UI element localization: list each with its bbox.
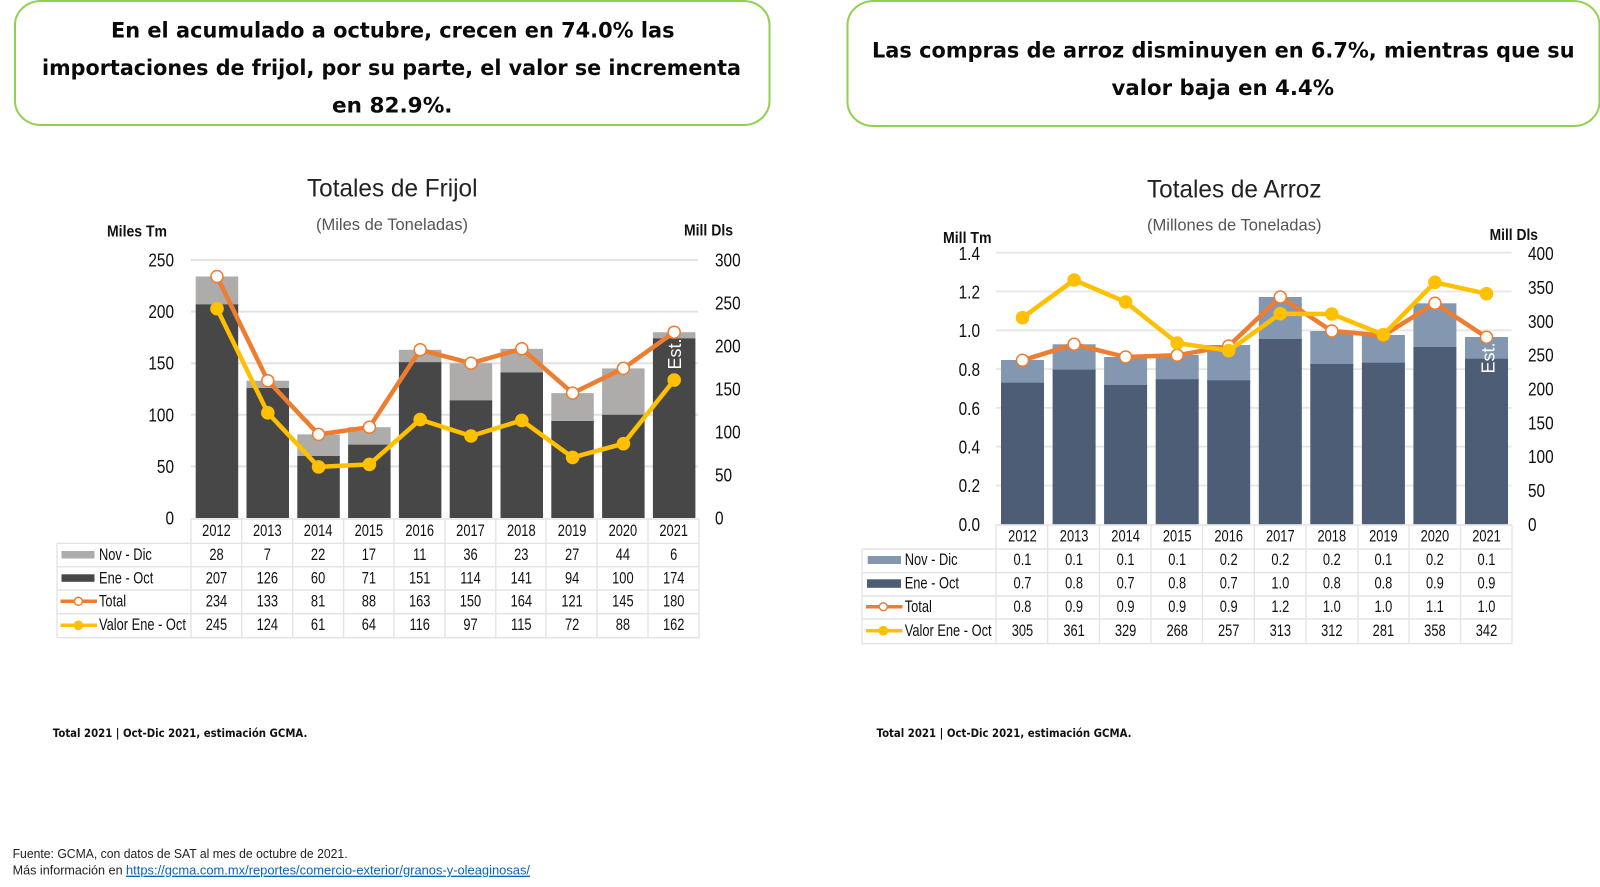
row: Nov - Dic: 17 — [362, 545, 376, 564]
callout: frijol: En el acumulado a octubre, crecen en 74.0% las — [111, 18, 674, 43]
callout: arroz: Las compras de arroz disminuyen en 6.7%, mientras que su — [872, 39, 1575, 64]
right axis labels: 0 — [1528, 515, 1537, 535]
right axis labels: 50 — [1528, 481, 1545, 501]
row: Ene - Oct: 0.7 — [1014, 574, 1031, 593]
row: Valor Ene - Oct: 245 — [206, 615, 227, 634]
table header: years: 2015 — [1163, 527, 1192, 546]
row: Total: 0.9 — [1065, 597, 1083, 617]
row: Ene - Oct: 151 — [409, 569, 430, 588]
row: Total: 234 — [206, 592, 227, 611]
row: Ene - Oct: 0.8 — [1168, 574, 1186, 593]
row: Valor Ene - Oct: 257 — [1218, 621, 1239, 641]
row: Valor Ene - Oct: Valor Ene - Oct — [905, 621, 992, 641]
right axis labels: 50 — [715, 465, 732, 486]
row: Ene - Oct: 0.7 — [1117, 574, 1135, 593]
axis title: Mill Tm: Mill Tm — [943, 230, 992, 247]
table header: years: 2017 — [1266, 527, 1295, 546]
left axis labels — [148, 250, 174, 529]
label: Est.: Est. — [1478, 342, 1498, 374]
row: Valor Ene - Oct: 124 — [257, 615, 278, 634]
row: Nov - Dic: 44 — [616, 545, 630, 564]
callout: frijol — [15, 1, 770, 125]
panel: frijol chart — [57, 175, 741, 638]
line: Total — [211, 270, 680, 440]
callout: arroz — [848, 1, 1600, 126]
left axis labels — [959, 244, 980, 535]
row: Nov - Dic: 11 — [413, 545, 426, 564]
row: Nov - Dic: Nov - Dic — [99, 545, 152, 564]
left axis labels: 0 — [165, 508, 174, 529]
row: Nov - Dic: 6 — [670, 545, 677, 564]
left axis labels: 250 — [148, 250, 174, 271]
bars: Ene - Oct — [1001, 339, 1508, 524]
right axis labels: 150 — [1528, 413, 1554, 434]
row: Nov - Dic: 0.1 — [1065, 551, 1083, 570]
left axis labels: 0.8 — [959, 360, 980, 380]
row: Ene - Oct: 126 — [257, 569, 278, 588]
right axis labels — [715, 250, 741, 529]
table header: years: 2016 — [1214, 527, 1243, 546]
row: Total: 164 — [511, 592, 532, 611]
row: Ene - Oct: 60 — [311, 569, 325, 588]
subtitle: Millones de Toneladas: (Millones de Toneladas) — [1147, 217, 1322, 235]
row: Valor Ene - Oct: 97 — [463, 615, 478, 634]
row: Total: 0.8 — [1014, 597, 1031, 617]
table header: years: 2014 — [1111, 527, 1140, 546]
row: Total: 133 — [257, 592, 278, 611]
row: Ene - Oct: 94 — [565, 569, 579, 588]
left axis labels: 1.0 — [959, 321, 980, 341]
row: Nov - Dic: 0.1 — [1168, 551, 1186, 570]
bars: Ene - Oct — [196, 304, 695, 518]
row: Valor Ene - Oct — [866, 621, 1497, 641]
right axis labels: 0 — [715, 508, 724, 529]
row: Ene - Oct: 0.8 — [1065, 574, 1083, 593]
row: Ene - Oct: 100 — [612, 569, 634, 588]
right axis labels: 200 — [1528, 379, 1554, 400]
row: Total: 81 — [311, 592, 325, 611]
source text — [13, 846, 530, 878]
axis title: Miles Tm: Miles Tm — [107, 224, 167, 241]
table header: years: 2013 — [1060, 527, 1088, 546]
right axis labels: 150 — [715, 379, 741, 400]
table header: years: 2012 — [202, 521, 231, 540]
row: Ene - Oct: 0.8 — [1374, 574, 1392, 593]
row: Total — [60, 592, 684, 611]
row: Ene - Oct: 207 — [206, 569, 227, 588]
row: Valor Ene - Oct: 115 — [511, 615, 532, 634]
table header: years: 2020 — [1421, 527, 1449, 546]
row: Valor Ene - Oct: 64 — [362, 615, 376, 634]
row: Ene - Oct: Ene - Oct — [905, 574, 960, 593]
row: Nov - Dic: 0.2 — [1271, 551, 1289, 570]
right axis labels: 100 — [715, 422, 741, 443]
table header: years: 2020 — [609, 521, 637, 540]
axis title: Mill Dls: Mill Dls — [1490, 227, 1538, 244]
row: Valor Ene - Oct: 281 — [1373, 621, 1394, 641]
row: Total: 145 — [612, 592, 634, 611]
row: Total: 1.0 — [1478, 597, 1495, 617]
row: Valor Ene - Oct — [60, 615, 684, 634]
table header: years: 2018 — [507, 521, 536, 540]
row: Ene - Oct: 71 — [362, 569, 376, 588]
table header: years: 2017 — [456, 521, 485, 540]
row: Total: 1.1 — [1426, 597, 1444, 617]
row: Valor Ene - Oct: 116 — [409, 615, 430, 634]
row: Ene - Oct: 174 — [663, 569, 684, 588]
row: Valor Ene - Oct: Valor Ene - Oct — [99, 615, 187, 634]
bars: Nov - Dic — [196, 276, 695, 457]
title: Totales de Frijol: Totales de Frijol — [307, 175, 478, 203]
right axis labels: 250 — [715, 293, 741, 314]
source text: Fuente: GCMA, con datos de SAT al mes de octubre de 2021. — [13, 846, 348, 861]
note: frijol estimate: Total 2021 | Oct-Dic 2021, estimación GCMA. — [53, 726, 307, 740]
row: Nov - Dic: 7 — [264, 545, 271, 564]
row: Nov - Dic: 0.2 — [1323, 551, 1341, 570]
row: Total: 1.2 — [1271, 597, 1289, 617]
row: Ene - Oct: 114 — [460, 569, 481, 588]
right axis labels: 400 — [1528, 244, 1554, 264]
row: Total: 0.9 — [1168, 597, 1186, 617]
left axis labels: 0.4 — [959, 437, 980, 458]
row: Valor Ene - Oct: 312 — [1321, 621, 1343, 641]
source text: https://gcma.com.mx/reportes/comercio-exterior/granos-y-oleaginosas/ — [126, 863, 530, 878]
row: Nov - Dic: Nov - Dic — [905, 551, 958, 570]
label: Est.: Est. — [665, 338, 685, 370]
row: Ene - Oct: 141 — [511, 569, 532, 588]
data table: frijol — [57, 519, 699, 638]
row: Nov - Dic: 22 — [311, 545, 325, 564]
bars: Nov - Dic — [1001, 297, 1508, 387]
table header: years: 2021 — [659, 521, 688, 540]
left axis labels: 150 — [148, 353, 174, 374]
row: Valor Ene - Oct: 61 — [311, 615, 325, 634]
row: Nov - Dic: 0.1 — [1014, 551, 1031, 570]
row: Valor Ene - Oct: 313 — [1270, 621, 1291, 641]
table header: years: 2019 — [558, 521, 586, 540]
right axis labels: 350 — [1528, 278, 1554, 298]
right axis labels: 300 — [1528, 312, 1554, 332]
left axis labels: 50 — [157, 457, 174, 477]
row: Nov - Dic: 0.1 — [1117, 551, 1135, 570]
right axis labels: 250 — [1528, 345, 1554, 366]
right axis labels: 300 — [715, 250, 741, 271]
row: Total: Total — [905, 597, 932, 617]
table header: years: 2013 — [253, 521, 282, 540]
row: Valor Ene - Oct: 342 — [1476, 621, 1497, 641]
row: Ene - Oct: 0.9 — [1426, 574, 1444, 593]
table header: years: 2019 — [1369, 527, 1398, 546]
row: Valor Ene - Oct: 361 — [1063, 621, 1085, 641]
row: Nov - Dic: 27 — [565, 545, 579, 564]
left axis labels: 1.4 — [959, 244, 980, 264]
row: Ene - Oct: 1.0 — [1271, 574, 1289, 593]
source text: Más información en — [13, 863, 123, 878]
row: Total: 1.0 — [1323, 597, 1341, 617]
row: Valor Ene - Oct: 358 — [1424, 621, 1446, 641]
row: Valor Ene - Oct: 268 — [1166, 621, 1188, 641]
row: Nov - Dic: 36 — [463, 545, 478, 564]
row: Total: 163 — [409, 592, 430, 611]
row: Total: Total — [99, 592, 126, 611]
row: Ene - Oct — [62, 569, 684, 588]
row: Nov - Dic: 28 — [209, 545, 224, 564]
row: Nov - Dic: 0.1 — [1374, 551, 1392, 570]
table header: years: 2012 — [1008, 527, 1037, 546]
right axis labels — [1528, 244, 1554, 535]
row: Valor Ene - Oct: 329 — [1115, 621, 1136, 641]
row: Total: 88 — [362, 592, 376, 611]
table header: years — [202, 521, 688, 540]
note: arroz estimate: Total 2021 | Oct-Dic 2021, estimación GCMA. — [876, 726, 1132, 740]
data table: arroz — [862, 525, 1512, 644]
left axis labels: 100 — [148, 405, 174, 426]
row: Nov - Dic: 23 — [514, 545, 528, 564]
left axis labels: 0.6 — [959, 399, 980, 419]
row: Nov - Dic: 0.2 — [1220, 551, 1238, 570]
left axis labels: 200 — [148, 302, 174, 322]
left axis labels: 0.0 — [959, 515, 980, 535]
row: Nov - Dic — [62, 545, 677, 564]
row: Total — [866, 597, 1495, 617]
table header: years: 2016 — [405, 521, 434, 540]
line: Valor Ene - Oct — [210, 302, 681, 474]
title: Totales de Arroz: Totales de Arroz — [1147, 176, 1322, 204]
row: Total: 180 — [663, 592, 684, 611]
panel: arroz chart — [862, 176, 1554, 644]
row: Total: 1.0 — [1374, 597, 1392, 617]
row: Nov - Dic: 0.1 — [1478, 551, 1495, 570]
row: Nov - Dic — [868, 551, 1495, 570]
left axis labels: 0.2 — [959, 476, 980, 496]
table header: years: 2015 — [355, 521, 383, 540]
row: Valor Ene - Oct: 305 — [1012, 621, 1033, 641]
callout: arroz: valor baja en 4.4% — [1112, 76, 1334, 101]
row: Total: 150 — [460, 592, 481, 611]
row: Valor Ene - Oct: 162 — [663, 615, 684, 634]
callout: frijol: en 82.9%. — [332, 93, 452, 118]
row: Ene - Oct: 0.7 — [1220, 574, 1238, 593]
line: Valor Ene - Oct — [1016, 273, 1493, 358]
row: Total: 0.9 — [1220, 597, 1238, 617]
row: Total: 0.9 — [1117, 597, 1135, 617]
row: Valor Ene - Oct: 72 — [565, 615, 579, 634]
row: Ene - Oct: Ene - Oct — [99, 569, 154, 588]
row: Ene - Oct: 0.8 — [1323, 574, 1341, 593]
row: Ene - Oct: 0.9 — [1478, 574, 1495, 593]
row: Nov - Dic: 0.2 — [1426, 551, 1444, 570]
subtitle: Miles de Toneladas: (Miles de Toneladas) — [316, 216, 468, 234]
table header: years: 2021 — [1472, 527, 1501, 546]
callout: frijol: importaciones de frijol, por su parte, el valor se incrementa — [42, 56, 741, 81]
left axis labels: 1.2 — [959, 282, 980, 303]
axis title: Mill Dls: Mill Dls — [684, 223, 733, 240]
row: Valor Ene - Oct: 88 — [616, 615, 630, 634]
table header: years: 2018 — [1317, 527, 1346, 546]
right axis labels: 100 — [1528, 447, 1554, 467]
row: Total: 121 — [561, 592, 583, 611]
line: Total — [1016, 291, 1492, 366]
right axis labels: 200 — [715, 336, 741, 357]
table header: years — [1008, 527, 1501, 546]
row: Ene - Oct — [867, 574, 1495, 593]
table header: years: 2014 — [304, 521, 332, 540]
